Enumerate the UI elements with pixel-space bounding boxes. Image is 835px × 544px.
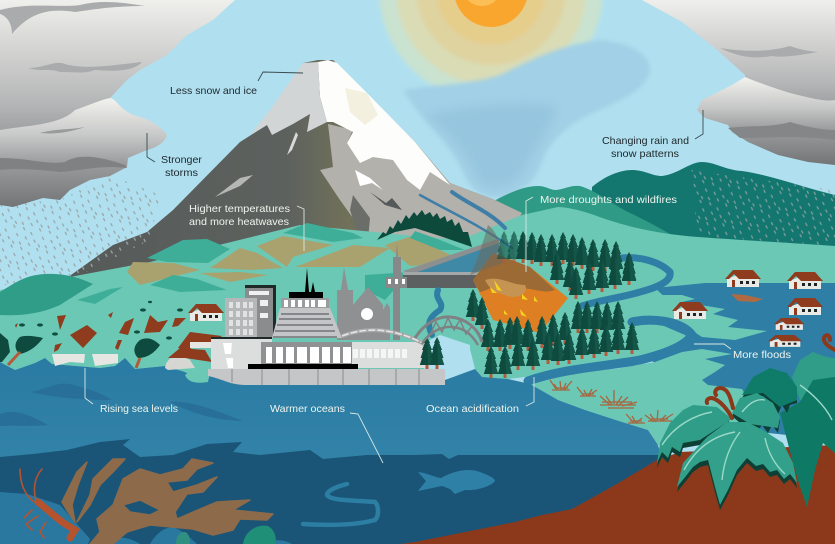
label: rising sea levels: Rising sea levels [100, 403, 178, 415]
left rain [0, 175, 160, 285]
mountain [50, 60, 522, 290]
label: more droughts and wildfires: More droughts and wildfires [540, 194, 677, 206]
label: more floods: More floods [733, 349, 791, 361]
seabed [0, 492, 292, 544]
mountain forest [377, 210, 472, 247]
farm fields [0, 223, 465, 315]
top frond [742, 368, 797, 414]
front frond [677, 422, 797, 510]
boat [731, 294, 763, 302]
mountain right grey face [320, 124, 522, 245]
fish [418, 470, 495, 494]
lower land shore [528, 349, 760, 445]
left storm cloud [0, 0, 235, 207]
fire [470, 225, 568, 333]
far hills [490, 162, 835, 260]
label: ocean acidification: Ocean acidification [426, 403, 519, 415]
green rocks [176, 526, 276, 544]
sun with halo [379, 0, 603, 102]
dark gullies [350, 195, 370, 240]
sports stadium [403, 239, 500, 288]
rain over far hills [690, 170, 835, 246]
parliament and city [208, 242, 445, 385]
label: less snow and ice [170, 72, 303, 97]
flood water [650, 283, 835, 440]
kelp [62, 459, 273, 544]
label: rising sea levels [85, 368, 178, 415]
conifer forest [466, 231, 639, 378]
crayfish [20, 469, 75, 538]
label: stronger storms [147, 133, 203, 179]
frond veins [662, 385, 832, 480]
fiddleheads [707, 335, 835, 418]
glacial river [420, 192, 512, 248]
rust coloured foreground earth [400, 445, 835, 544]
waterfront trees [420, 337, 434, 369]
storm debris and flooded left houses [0, 301, 224, 383]
label: higher temperatures: and more heatwaves [189, 216, 289, 228]
label: warmer oceans [270, 403, 383, 463]
cathedral [337, 267, 390, 340]
left frond [657, 405, 732, 468]
label: changing rain and snow patterns: snow patterns [611, 148, 679, 160]
snow patches [287, 132, 298, 155]
main land [0, 207, 835, 379]
label: warmer oceans: Warmer oceans [270, 403, 345, 415]
label: higher temperatures [189, 203, 304, 251]
back right frond [780, 377, 835, 507]
right rain cloud [642, 0, 835, 165]
label: ocean acidification [426, 377, 534, 415]
label: changing rain and snow patterns: Changing rain and [602, 135, 689, 147]
heat haze plume [403, 40, 650, 198]
grey ice upper slope [250, 62, 327, 135]
label: less snow and ice: Less snow and ice [170, 85, 257, 97]
right curved building [352, 342, 425, 368]
sky tower [385, 242, 407, 340]
eel [303, 484, 378, 525]
label: higher temperatures: Higher temperatures [189, 203, 290, 215]
label: stronger storms: storms [165, 167, 198, 179]
ferns [657, 335, 835, 510]
label: more floods [694, 344, 791, 361]
top right frond [792, 352, 835, 400]
ocean [0, 358, 665, 470]
rivers [429, 258, 692, 381]
beehive [272, 308, 342, 338]
cloud wisps [0, 2, 145, 73]
land strip with house [602, 295, 767, 340]
ocean current wisps [0, 384, 243, 426]
labels and leader lines [85, 72, 791, 463]
flooded houses [672, 270, 823, 347]
wind blown trees [0, 333, 10, 362]
dry vegetation [550, 380, 673, 423]
label: changing rain and snow patterns [602, 110, 703, 160]
quay [208, 369, 445, 385]
label: more droughts and wildfires [526, 194, 677, 272]
left low building [211, 338, 272, 369]
snow cap [318, 60, 450, 190]
light office tower [225, 298, 257, 338]
label: stronger storms: Stronger [161, 154, 203, 166]
bridge [415, 317, 482, 345]
mid frond [732, 393, 780, 433]
dark office tower [245, 285, 276, 338]
deep ocean [0, 439, 665, 544]
